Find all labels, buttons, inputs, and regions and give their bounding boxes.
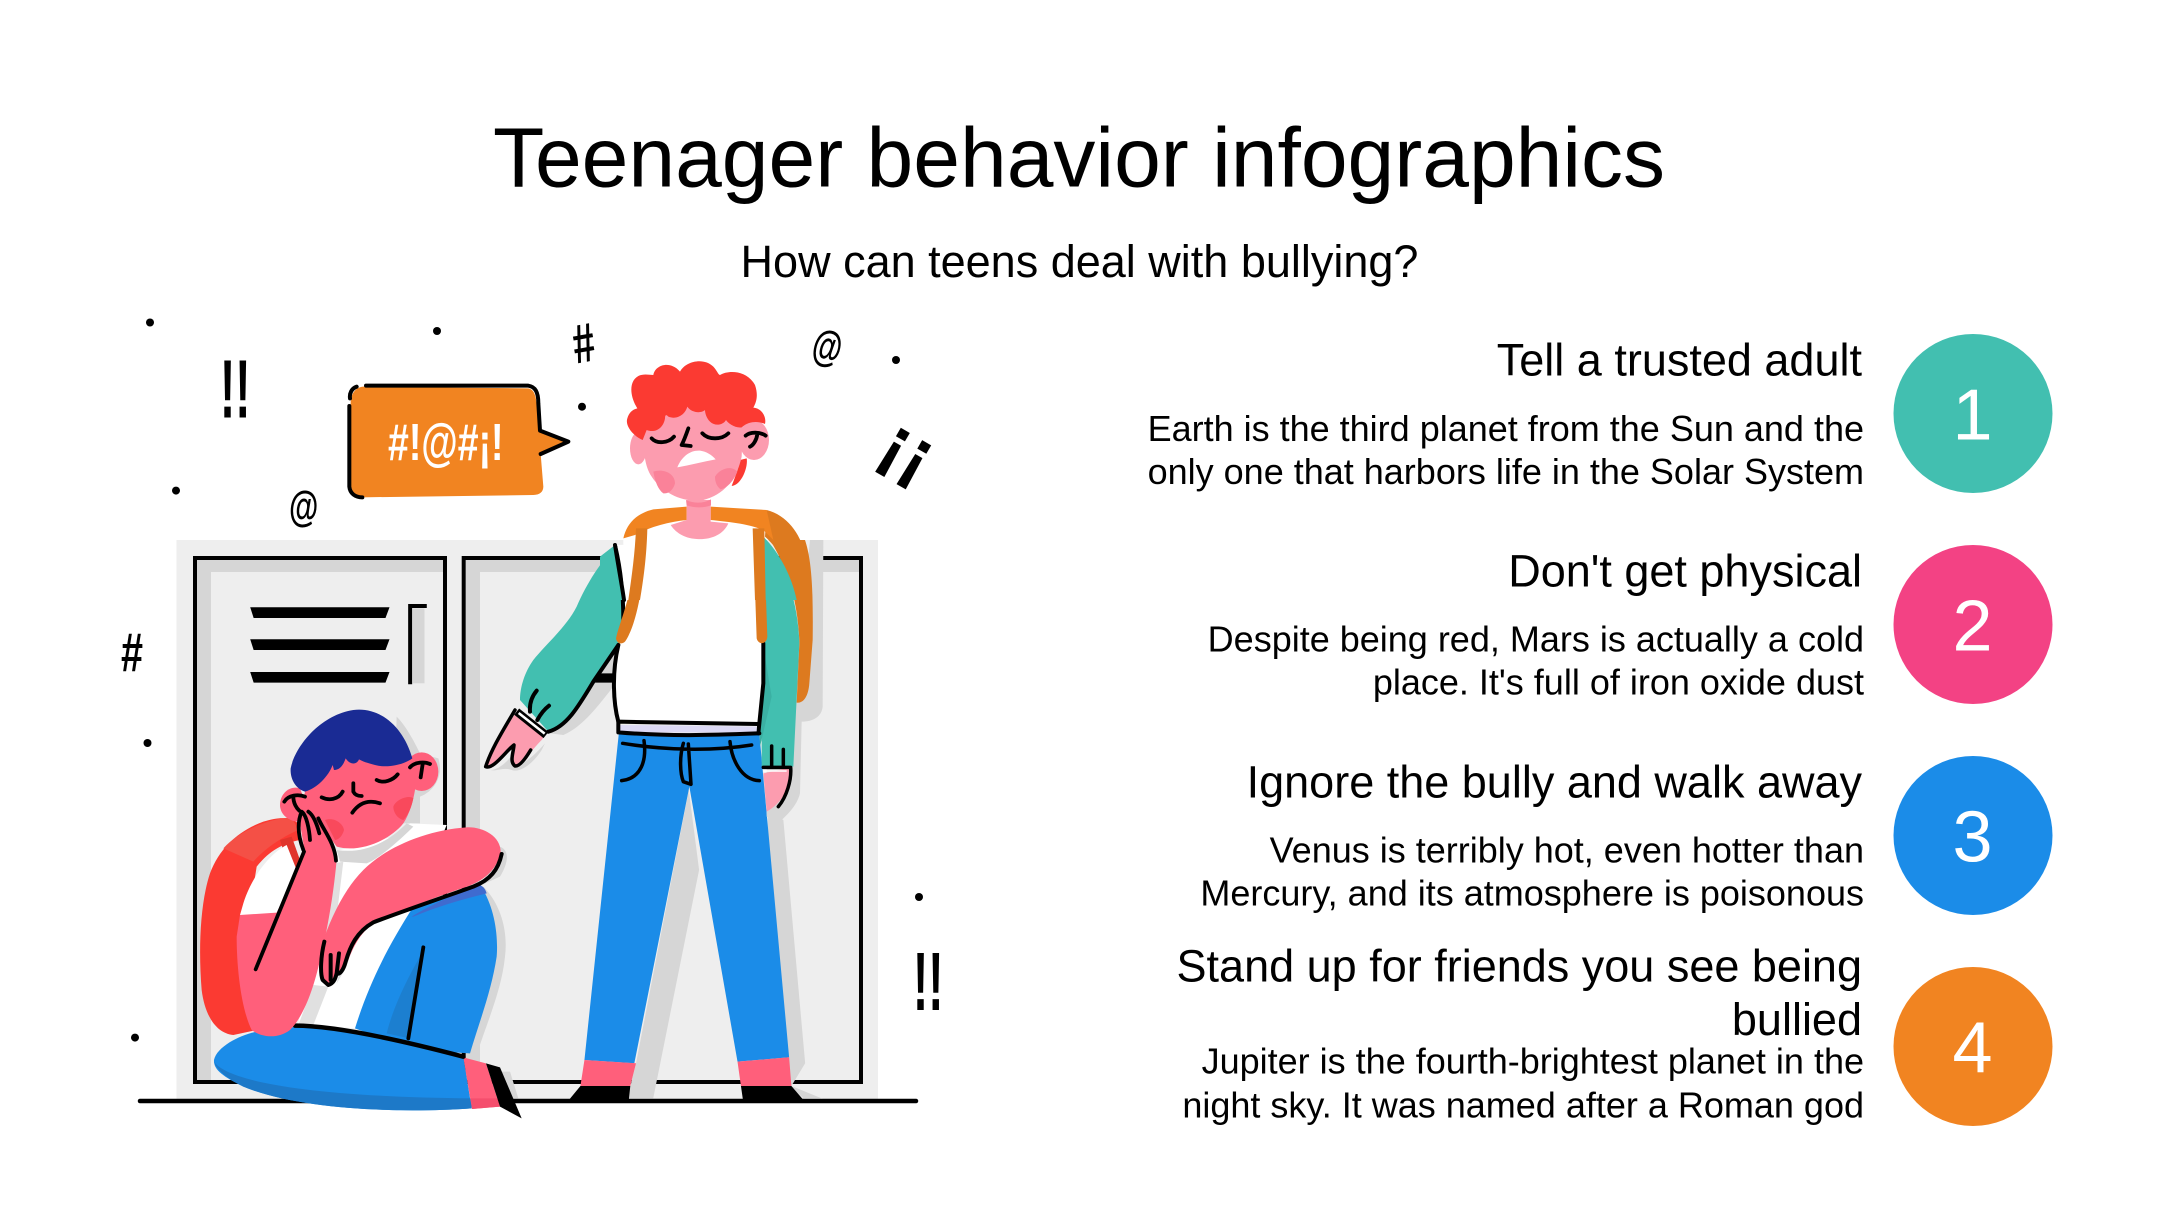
standing bully (486, 361, 823, 1102)
step 4 (1177, 940, 2052, 1126)
step 1: 1 (1952, 376, 1993, 456)
decorative symbols: !! (913, 936, 943, 1029)
step 3: Mercury, and its atmosphere is poisonous (1200, 872, 1864, 914)
bully legs and shadow (567, 733, 822, 1102)
decorative symbols: @ (289, 481, 318, 530)
step 2: Despite being red, Mars is actually a cold (1208, 618, 1864, 660)
teen backpack (200, 818, 300, 1035)
step 4: Jupiter is the fourth-brightest planet in the (1202, 1040, 1864, 1082)
teen head and arms (237, 710, 502, 1036)
step 1: Earth is the third planet from the Sun and the (1148, 408, 1864, 449)
step 3: Ignore the bully and walk away (1247, 756, 1862, 808)
step 3 (1200, 756, 2052, 915)
speech bubble (349, 386, 568, 497)
decorative symbols (121, 312, 951, 1042)
title: Teenager behavior infographics (493, 110, 1665, 204)
decorative symbols: ¡¡ (867, 400, 951, 497)
step 2: 2 (1952, 586, 1993, 666)
teen upper body (200, 717, 507, 1053)
step 4: bullied (1732, 994, 1862, 1045)
decorative symbols: # (568, 312, 600, 376)
step 4: 4 (1952, 1008, 1993, 1088)
bully pointing hand (487, 710, 547, 767)
step 2: Don't get physical (1508, 546, 1862, 596)
step 2: place. It's full of iron oxide dust (1373, 662, 1864, 702)
step 3: 3 (1952, 798, 1993, 878)
step 4: night sky. It was named after a Roman god (1182, 1084, 1864, 1126)
subtitle: How can teens deal with bullying? (741, 236, 1418, 287)
backpack straps (765, 510, 812, 600)
step 3: Venus is terribly hot, even hotter than (1270, 830, 1864, 870)
sitting teen (200, 710, 522, 1118)
decorative symbols: @ (809, 319, 846, 372)
teen lower leg (214, 1026, 522, 1118)
decorative symbols: # (121, 623, 143, 684)
speech bubble: #!@#¡! (388, 413, 504, 471)
bully other hand (763, 767, 791, 812)
teen raised leg (355, 885, 497, 1053)
step 4: Stand up for friends you see being (1177, 940, 1862, 992)
lockers (176, 540, 878, 1101)
bully head and shoulders (600, 361, 812, 600)
bully torso and arms (486, 540, 823, 823)
step 1: Tell a trusted adult (1497, 334, 1862, 386)
step 1 (1148, 334, 2052, 493)
illustration: bullying scene (121, 312, 951, 1118)
decorative symbols: !! (220, 343, 250, 436)
step 1: only one that harbors life in the Solar System (1148, 451, 1864, 492)
ground line (140, 1099, 916, 1103)
step 2 (1208, 545, 2052, 704)
teen shirt (240, 823, 447, 1028)
